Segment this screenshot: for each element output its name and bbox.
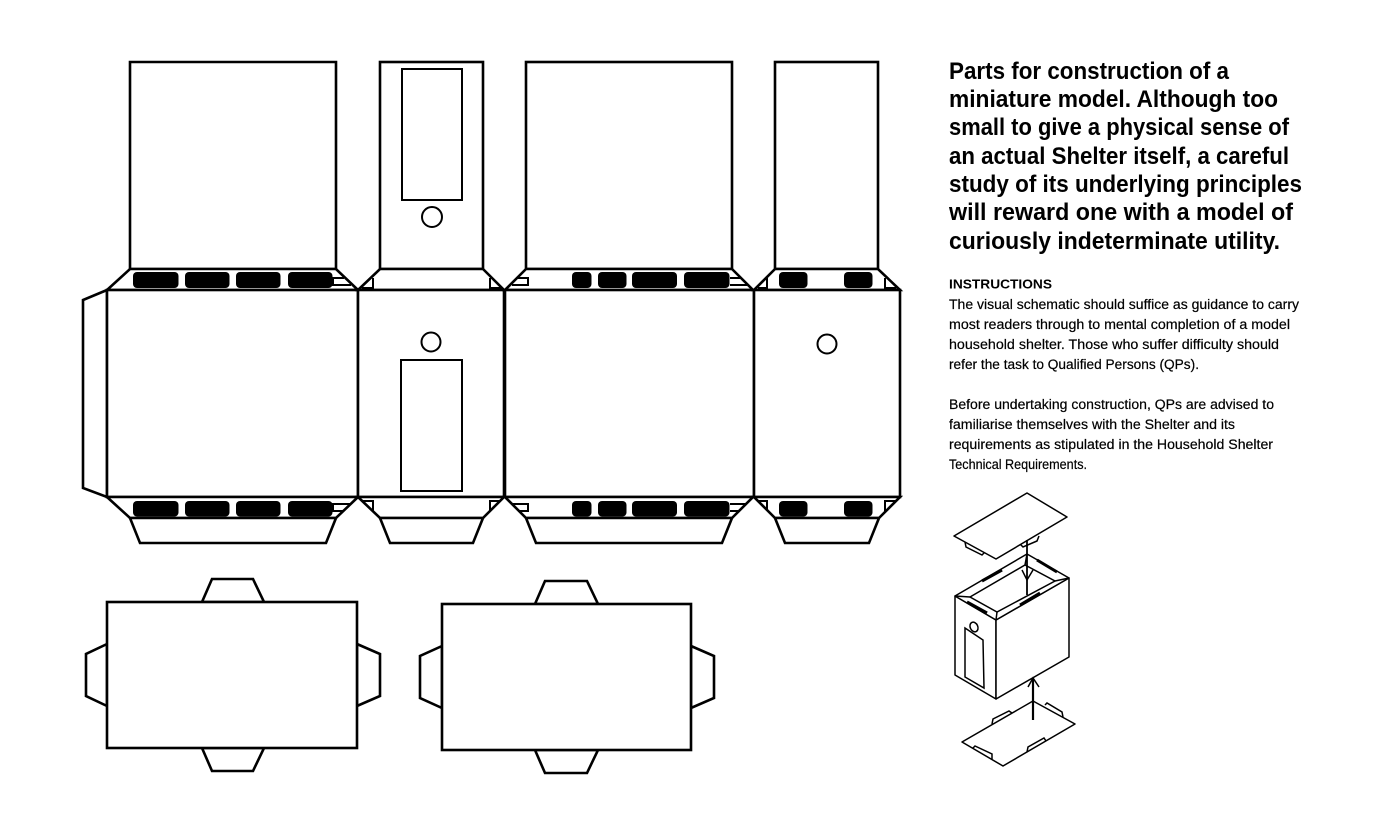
text block: instructions: Before undertaking construction, QPs are advised to xyxy=(949,397,1274,412)
wall section D xyxy=(754,62,900,543)
text block: instructions xyxy=(949,276,1299,472)
side glue tab xyxy=(83,290,107,497)
text block: instructions: refer the task to Qualified Persons (QPs). xyxy=(949,357,1199,372)
lid xyxy=(954,493,1067,559)
heading: Parts for construction of a xyxy=(949,58,1230,85)
bottom slots xyxy=(133,501,351,516)
text block: instructions: most readers through to mental completion of a model xyxy=(949,317,1290,332)
heading: will reward one with a model of xyxy=(948,199,1294,226)
panel: net of shelter walls xyxy=(83,62,900,543)
wall section B with door xyxy=(358,62,504,543)
base xyxy=(962,701,1075,766)
text block: instructions: INSTRUCTIONS xyxy=(949,276,1052,292)
heading xyxy=(948,58,1302,255)
text block: instructions: Technical Requirements. xyxy=(949,457,1087,472)
box body xyxy=(955,554,1069,699)
top slots xyxy=(512,272,747,288)
text block: instructions: The visual schematic should suffice as guidance to carry xyxy=(949,297,1299,312)
panel: second rectangular end piece xyxy=(420,581,714,773)
heading: study of its underlying principles xyxy=(949,171,1302,198)
wall section A xyxy=(83,62,358,543)
text block: instructions: requirements as stipulated in the Household Shelter xyxy=(949,437,1274,452)
heading: miniature model. Although too xyxy=(949,86,1278,113)
top slots xyxy=(133,272,351,288)
text block: instructions: familiarise themselves with the Shelter and its xyxy=(949,417,1235,432)
bottom slots xyxy=(512,501,747,516)
arrow: base up xyxy=(1028,678,1039,720)
text block: instructions: household shelter. Those who suffer difficulty should xyxy=(949,337,1279,352)
arrow: lid down xyxy=(1022,540,1033,595)
heading: curiously indeterminate utility. xyxy=(949,228,1280,255)
wall section C xyxy=(505,62,754,543)
heading: an actual Shelter itself, a careful xyxy=(949,143,1289,170)
panel: first rectangular end piece xyxy=(86,579,380,771)
heading: small to give a physical sense of xyxy=(949,114,1290,141)
isometric assembly diagram xyxy=(954,493,1075,766)
